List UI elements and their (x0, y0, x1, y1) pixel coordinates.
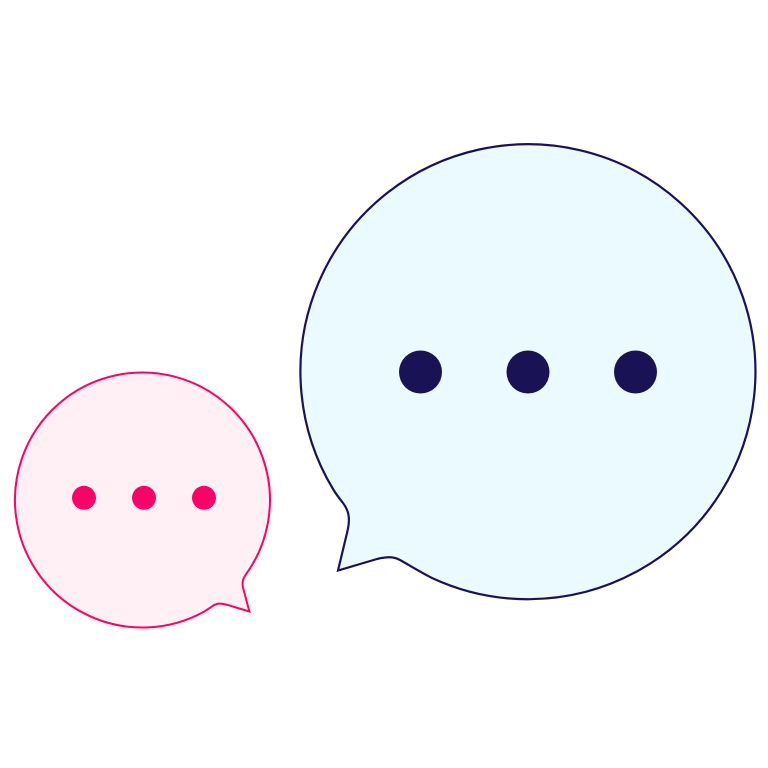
small pink speech bubble (15, 372, 270, 627)
typing dots: pink (72, 486, 216, 510)
large blue speech bubble (300, 144, 755, 599)
bubble outline with tail (300, 144, 755, 599)
typing dots: navy (399, 350, 657, 394)
bubble outline with tail (15, 372, 270, 627)
